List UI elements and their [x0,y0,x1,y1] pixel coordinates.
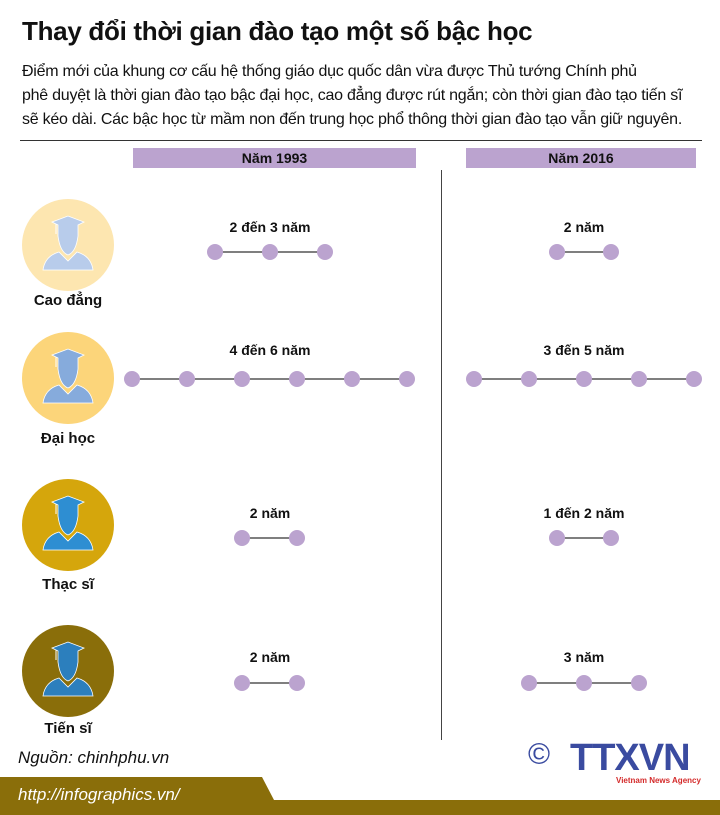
text: 1 đến 2 năm [544,505,624,521]
logo: TTXVN: Vietnam News Agency [616,776,701,785]
text: Đại học [41,430,95,447]
text: 4 đến 6 năm [230,342,310,358]
text: Tiến sĩ [44,720,92,737]
text: 2 năm [250,505,290,521]
text: 3 năm [564,649,604,665]
text: 2 năm [250,649,290,665]
level names: Cao đẳng [34,292,102,309]
icon: tien si [22,625,114,717]
logo: TTXVN [528,737,701,785]
intro text: sẽ kéo dài. Các bậc học từ mầm non đến trung học phổ thông thời gian đào tạo vẫn giữ nguyên. [22,111,682,128]
intro text: phê duyệt là thời gian đào tạo bậc đại học, cao đẳng được rút ngắn; còn thời gian đào tạo tiến sĩ [22,87,682,104]
icon: dai hoc [22,332,114,424]
url: http://infographics.vn/ [18,785,180,804]
icon: thac si [22,479,114,571]
intro text: Điểm mới của khung cơ cấu hệ thống giáo dục quốc dân vừa được Thủ tướng Chính phủ [22,63,637,80]
title: Thay đổi thời gian đào tạo một số bậc học [22,16,532,46]
duration labels: 2 đến 3 năm [230,219,310,235]
text: Thạc sĩ [42,576,94,593]
footer band [0,777,720,815]
header: 2016: Năm 2016 [548,150,614,166]
header: 1993 [133,148,416,168]
source: Nguồn: chinhphu.vn [18,748,169,767]
text: 3 đến 5 năm [544,342,624,358]
logo: TTXVN: © [528,738,550,771]
header: 2016 [466,148,696,168]
header: 1993: Năm 1993 [242,150,307,166]
logo: TTXVN: TTXVN [570,737,690,779]
text: 2 năm [564,219,604,235]
intro text [22,63,683,128]
icon: cao dang [22,199,114,291]
